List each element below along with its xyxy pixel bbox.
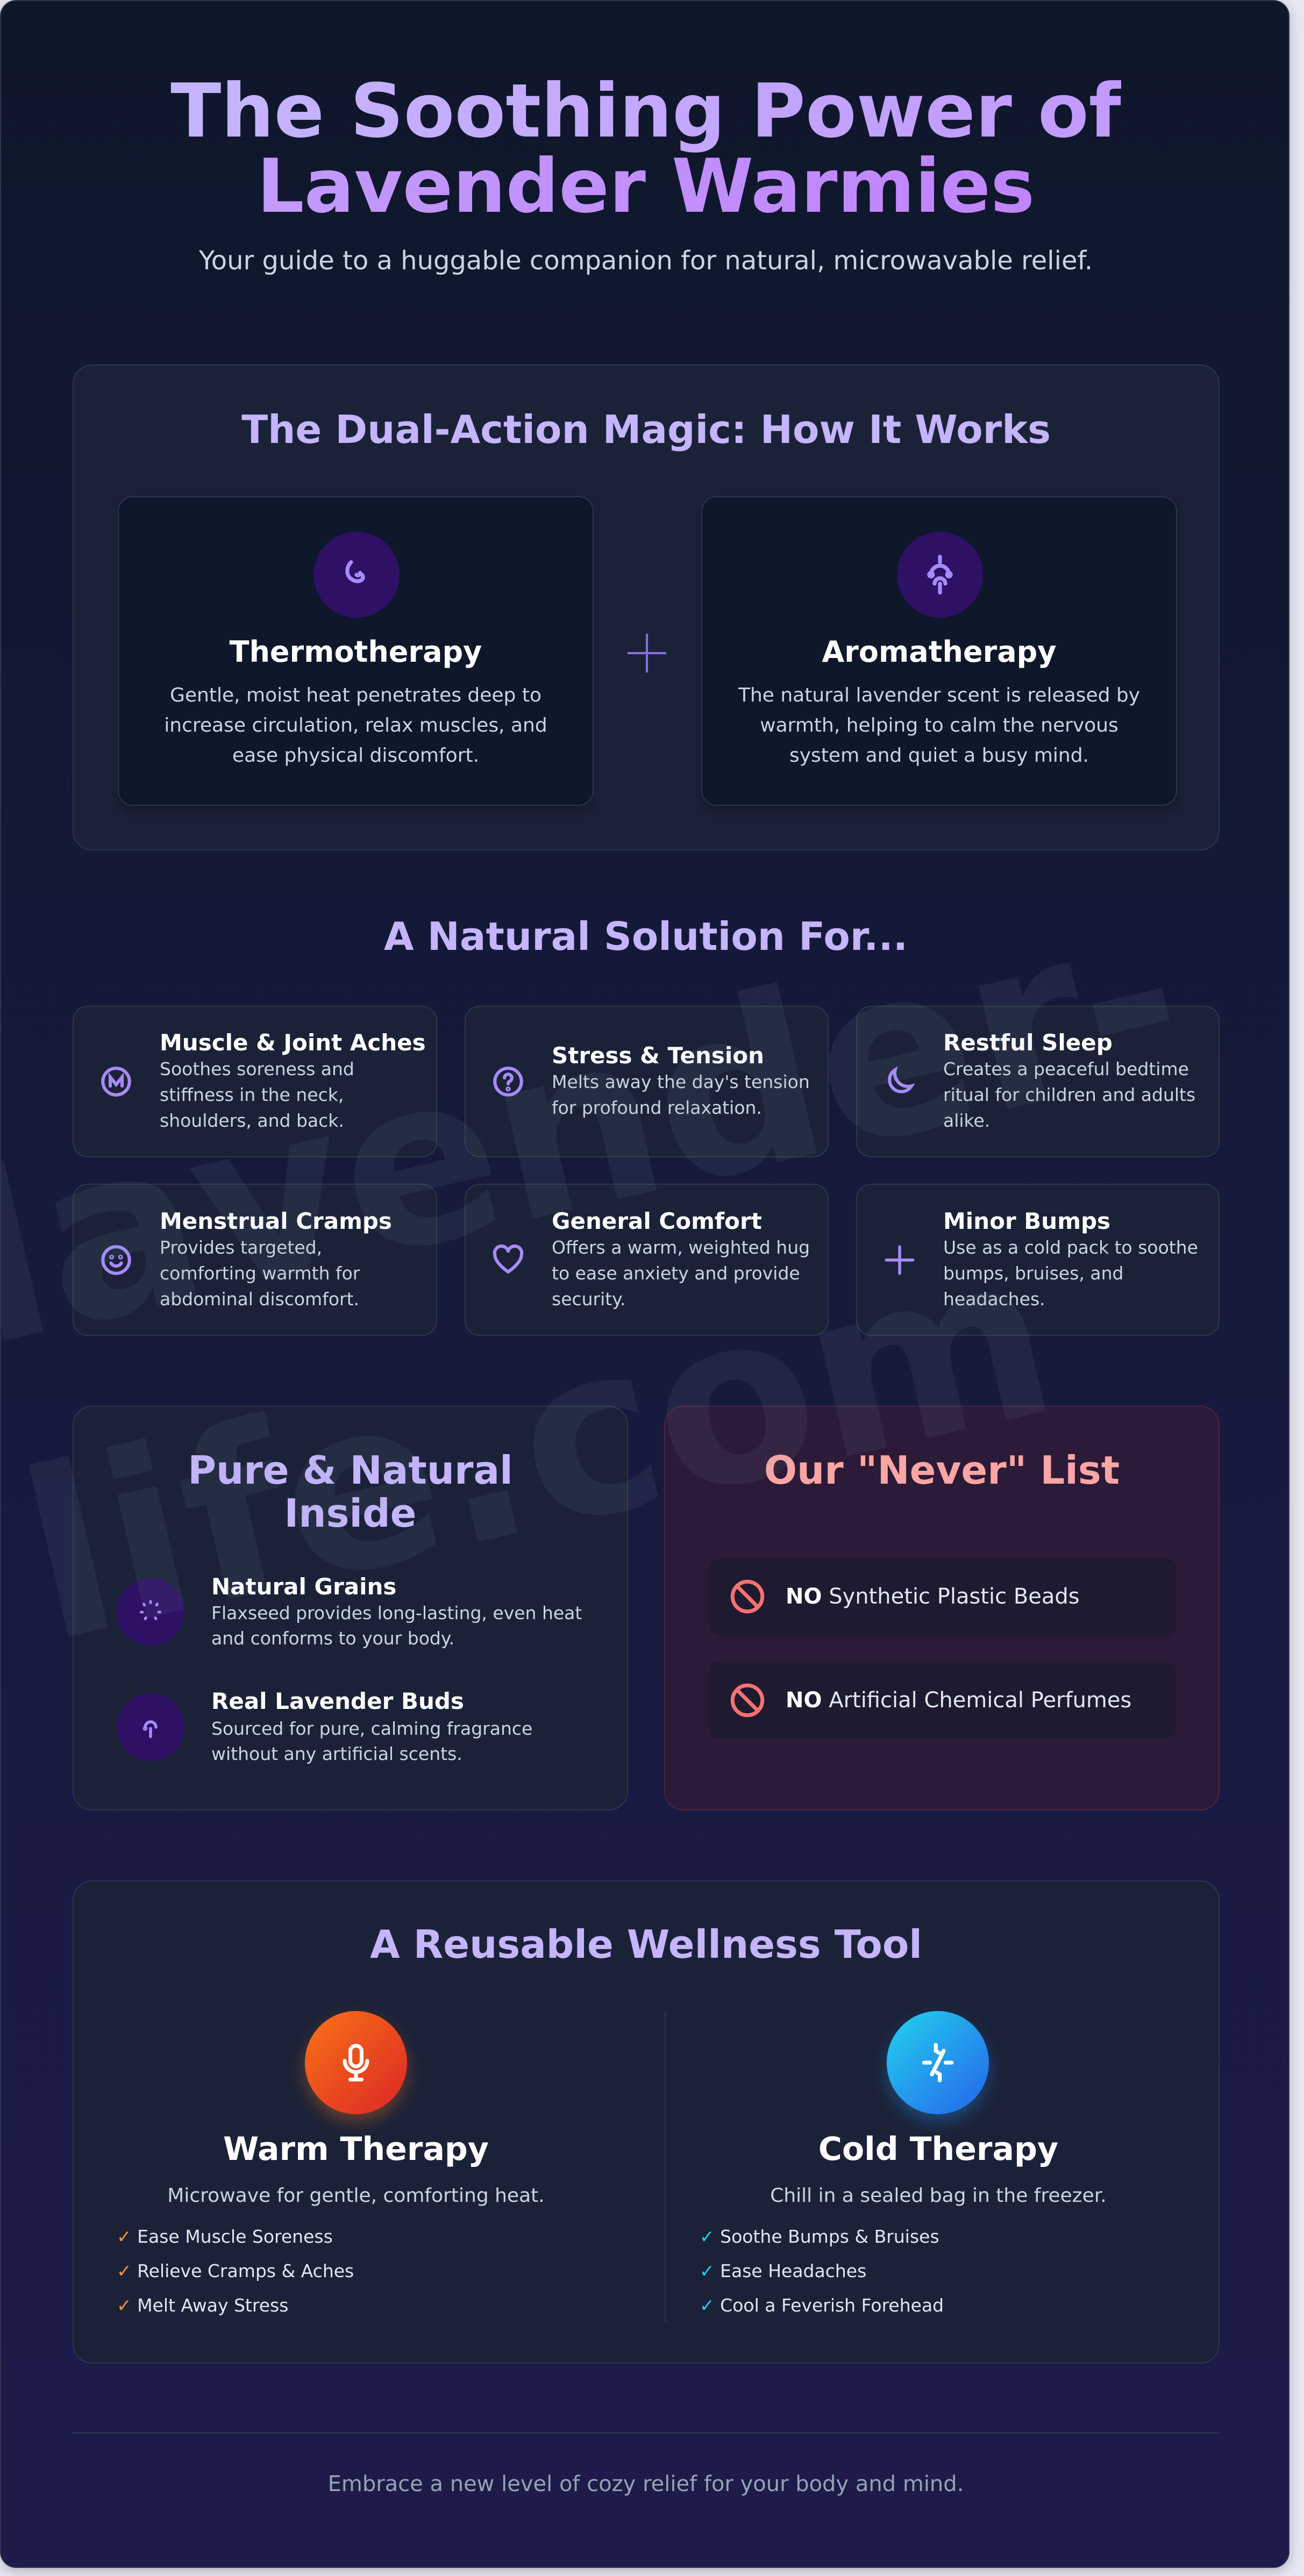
panel: pure & natural xyxy=(73,1406,628,1811)
footer text: Embrace a new level of cozy relief for your body and mind. xyxy=(328,2472,964,2496)
solution card: sleep xyxy=(856,1006,1220,1157)
solution card: sleep: alike. xyxy=(943,1110,990,1131)
solution card: stress: Stress & Tension xyxy=(552,1042,764,1069)
column: warm therapy xyxy=(117,2010,545,2316)
solution card: muscle: stiffness in the neck, xyxy=(160,1084,344,1105)
description: increase circulation, relax muscles, and xyxy=(164,714,547,736)
plus sign xyxy=(628,634,666,672)
item: lavender buds: Real Lavender Buds xyxy=(211,1688,464,1714)
column: warm therapy: ✓ Relieve Cramps & Aches xyxy=(117,2260,354,2281)
heading: Pure & Natural xyxy=(188,1448,513,1493)
solution card: cramps: Menstrual Cramps xyxy=(160,1207,392,1234)
solution card: cramps: Provides targeted, xyxy=(160,1236,322,1258)
never item 1 xyxy=(709,1558,1177,1635)
solution card: comfort: security. xyxy=(552,1288,626,1310)
solution card: comfort: to ease anxiety and provide xyxy=(552,1262,800,1284)
column: cold therapy: ✓ Ease Headaches xyxy=(700,2260,866,2281)
solution card: bumps: Minor Bumps xyxy=(943,1207,1110,1234)
watermark: life.com xyxy=(1,1198,1076,1694)
icon: scent xyxy=(897,532,983,618)
description: ease physical discomfort. xyxy=(232,745,479,767)
checklist: ✓ Soothe Bumps & Bruises xyxy=(700,2226,939,2247)
solution card: bumps: Use as a cold pack to soothe xyxy=(943,1236,1198,1258)
solution card: muscle: Soothes soreness and xyxy=(160,1058,354,1079)
solution card: sleep: Creates a peaceful bedtime xyxy=(943,1058,1189,1079)
solution card: sleep: Restful Sleep xyxy=(943,1029,1113,1056)
description: system and quiet a busy mind. xyxy=(789,745,1089,767)
solution card: bumps xyxy=(856,1184,1220,1336)
description: Microwave for gentle, comforting heat. xyxy=(167,2185,545,2207)
item: lavender buds: Sourced for pure, calming fragrance xyxy=(211,1718,532,1739)
solution card: muscle: shoulders, and back. xyxy=(160,1110,344,1131)
column: cold therapy xyxy=(700,2010,1107,2316)
item: natural grains: Flaxseed provides long-lasting, even heat xyxy=(211,1602,582,1623)
heading: Our "Never" List xyxy=(764,1448,1120,1493)
title xyxy=(170,68,1121,230)
title: The Soothing Power of xyxy=(170,68,1121,154)
solution card: stress: Melts away the day's tension xyxy=(552,1071,810,1092)
solution card: sleep: ritual for children and adults xyxy=(943,1084,1195,1105)
card: aromatherapy xyxy=(701,496,1177,806)
heading xyxy=(188,1448,513,1536)
solution card: bumps: headaches. xyxy=(943,1288,1045,1310)
checklist: ✓ Ease Muscle Soreness xyxy=(117,2226,333,2247)
title: Lavender Warmies xyxy=(257,143,1035,230)
title: Cold Therapy xyxy=(818,2130,1058,2168)
solution card: muscle: Muscle & Joint Aches xyxy=(160,1029,426,1056)
solution card: cramps: comforting warmth for xyxy=(160,1262,360,1284)
solution card: stress: for profound relaxation. xyxy=(552,1097,762,1118)
solution card: comfort: General Comfort xyxy=(552,1207,762,1234)
never item 2: NO Artificial Chemical Perfumes xyxy=(786,1688,1131,1713)
item: lavender buds xyxy=(117,1688,532,1764)
icon: cold xyxy=(887,2011,989,2114)
solution card: comfort xyxy=(465,1184,829,1336)
description: Gentle, moist heat penetrates deep to xyxy=(170,684,541,706)
heading: Aromatherapy xyxy=(822,635,1057,669)
divider xyxy=(665,2011,666,2322)
solution card: stress xyxy=(465,1006,829,1157)
description xyxy=(738,684,1140,767)
item: natural grains: and conforms to your body. xyxy=(211,1628,454,1649)
heading: A Reusable Wellness Tool xyxy=(370,1922,922,1967)
panel: how it works xyxy=(73,364,1220,850)
card: thermotherapy xyxy=(118,496,594,806)
description: The natural lavender scent is released by xyxy=(738,684,1140,706)
panel: reusable tool xyxy=(73,1880,1220,2364)
subtitle: Your guide to a huggable companion for natural, microwavable relief. xyxy=(199,246,1093,276)
item: lavender buds: without any artificial scents. xyxy=(211,1743,462,1764)
icon: warm xyxy=(305,2011,407,2114)
column: cold therapy: ✓ Cool a Feverish Forehead xyxy=(700,2295,944,2316)
solution card: bumps: bumps, bruises, and xyxy=(943,1262,1123,1284)
panel: never list xyxy=(664,1406,1220,1811)
solution card: cramps: abdominal discomfort. xyxy=(160,1288,359,1310)
never item 1: NO Synthetic Plastic Beads xyxy=(786,1584,1080,1609)
description: warmth, helping to calm the nervous xyxy=(760,714,1118,736)
solution card: cramps xyxy=(73,1184,437,1336)
heading: natural solution: A Natural Solution For... xyxy=(384,914,908,959)
heading: Thermotherapy xyxy=(230,635,482,669)
item: natural grains xyxy=(117,1573,582,1649)
never item 2 xyxy=(709,1662,1177,1738)
icon: heat xyxy=(313,532,400,618)
description xyxy=(164,684,547,767)
column: warm therapy: ✓ Melt Away Stress xyxy=(117,2295,288,2316)
heading: Inside xyxy=(284,1491,416,1536)
solution card: comfort: Offers a warm, weighted hug xyxy=(552,1236,810,1258)
heading: dual action: The Dual-Action Magic: How It Works xyxy=(241,407,1051,452)
solution card: muscle xyxy=(73,1006,437,1157)
description: Chill in a sealed bag in the freezer. xyxy=(770,2185,1107,2207)
title: Warm Therapy xyxy=(223,2130,489,2168)
item: natural grains: Natural Grains xyxy=(211,1573,396,1600)
